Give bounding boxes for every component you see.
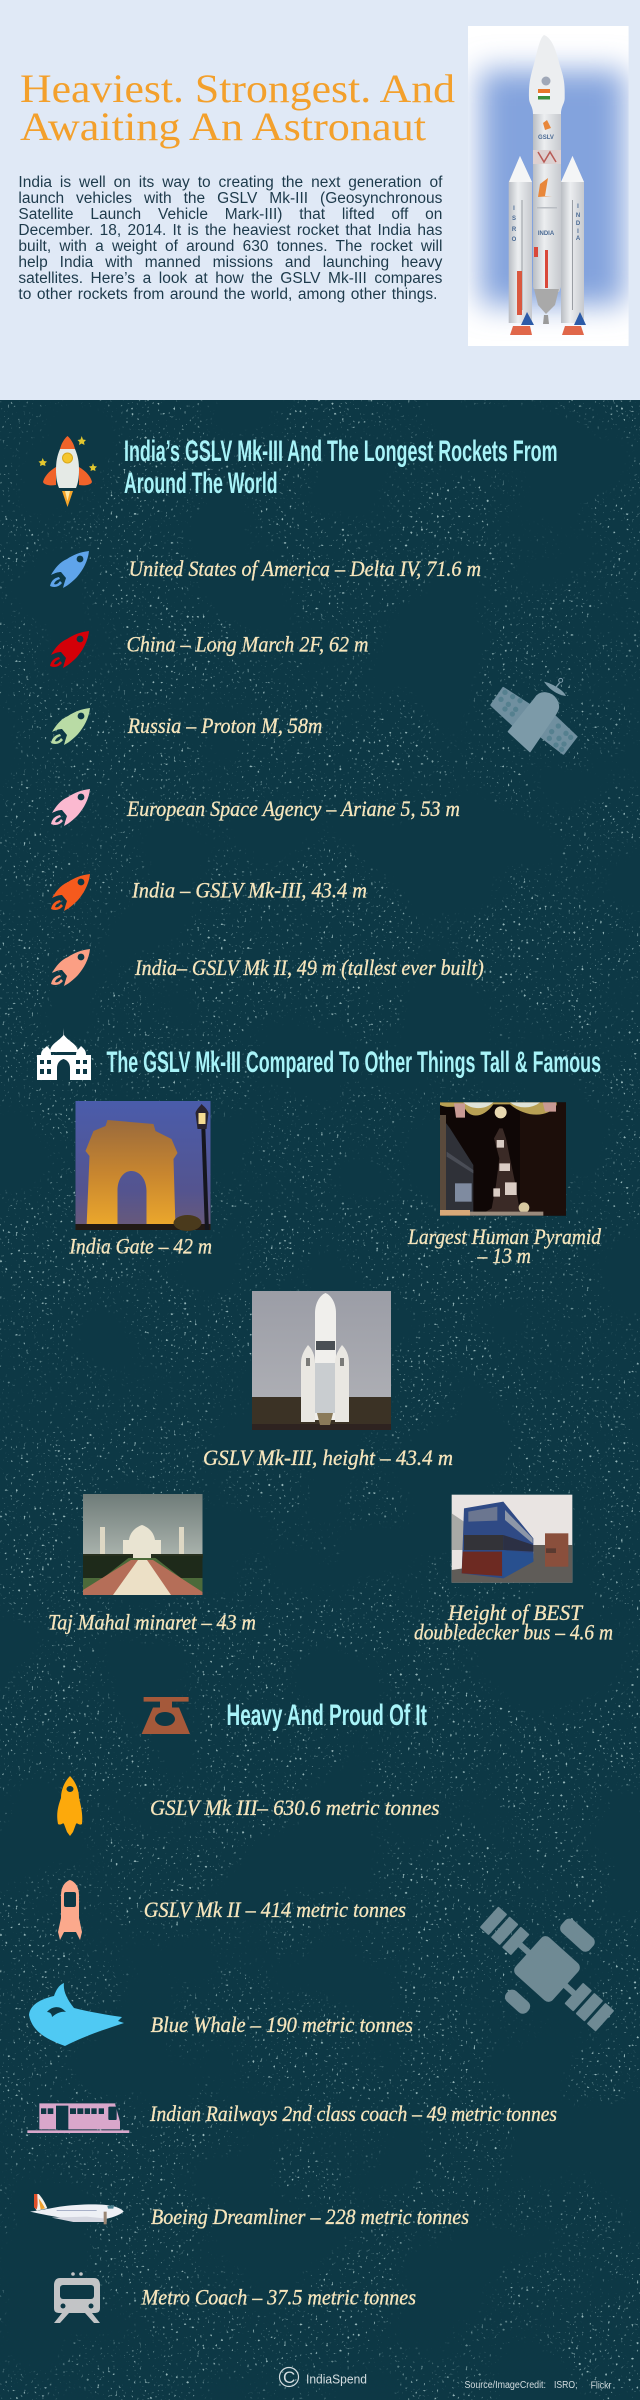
caption: human pyramid	[407, 1224, 602, 1268]
rocket illustration: O	[512, 237, 517, 243]
rocket row: China	[50, 631, 368, 668]
heading text: Heavy And Proud Of It	[226, 1699, 427, 1732]
rocket row: Russia: Russia – Proton M, 58m	[127, 713, 322, 738]
intro paragraph: satellites. Here’s a look at how the GSLV Mk-III compares	[18, 270, 442, 287]
caption: BEST bus	[414, 1600, 613, 1644]
rocket illustration	[468, 26, 629, 346]
rocket row: China: China – Long March 2F, 62 m	[126, 632, 368, 656]
weight row: blue whale	[29, 1983, 413, 2046]
rocket row: European Space Agency: European Space Agency – Ariane 5, 53 m	[126, 796, 460, 821]
title	[20, 66, 455, 149]
rocket illustration: GSLV	[538, 135, 554, 141]
rocket illustration: I	[513, 206, 515, 212]
rocket row: Russia	[51, 708, 322, 745]
rocket row: USA	[50, 551, 481, 588]
footer: source: Flickr	[591, 2380, 612, 2392]
intro paragraph: Satellite Launch Vehicle Mark-III) that lifted off on	[18, 206, 442, 223]
photo: Taj Mahal	[83, 1494, 203, 1595]
rocket illustration: A	[576, 236, 581, 242]
photo: GSLV Mk-III on pad	[252, 1291, 391, 1430]
icon: weighing scale	[142, 1697, 190, 1734]
icon: Taj Mahal	[37, 1028, 91, 1080]
footer: source: Source/ImageCredit:	[464, 2380, 546, 2391]
weight row: plane	[30, 2194, 469, 2229]
footer: source	[464, 2380, 612, 2392]
section heading: heavy	[142, 1697, 427, 1734]
icon: space rocket with stars	[38, 436, 97, 507]
rocket row: India Mk II	[51, 949, 484, 986]
title: Heaviest. Strongest. And	[20, 66, 455, 111]
caption: Taj Mahal: Taj Mahal minaret – 43 m	[48, 1610, 256, 1634]
footer: IndiaSpend credit	[280, 2368, 367, 2387]
weight row: plane: Boeing Dreamliner – 228 metric tonnes	[151, 2204, 469, 2229]
caption: human pyramid: – 13 m	[477, 1243, 531, 1268]
weight row: metro coach	[54, 2272, 416, 2323]
rocket illustration: S	[512, 216, 516, 222]
footer: IndiaSpend credit: C	[283, 2368, 295, 2387]
intro paragraph: built, with a weight of around 630 tonnes. The rocket will	[18, 238, 442, 255]
weight row: metro coach: Metro Coach – 37.5 metric tonnes	[141, 2284, 416, 2309]
icon: satellite with dish	[492, 678, 576, 753]
intro paragraph: December. 18, 2014. It is the heaviest rocket that India has	[18, 222, 442, 239]
rocket row: European Space Agency	[51, 789, 460, 826]
header panel	[0, 0, 640, 400]
photo: India Gate	[76, 1101, 210, 1231]
footer: IndiaSpend credit: IndiaSpend	[306, 2372, 367, 2386]
weight row: GSLV Mk III: GSLV Mk III– 630.6 metric tonnes	[150, 1795, 440, 1820]
weight row: GSLV Mk II	[58, 1880, 406, 1940]
weight row: railway coach: Indian Railways 2nd class coach – 49 metric tonnes	[149, 2101, 557, 2126]
intro paragraph: India is well on its way to creating the next generation of	[18, 174, 442, 191]
photo: human pyramid	[440, 1102, 566, 1216]
section heading: longest rockets	[38, 435, 558, 507]
rocket illustration: I	[577, 204, 579, 210]
rocket illustration: INDIA	[538, 231, 555, 237]
caption: BEST bus: Height of BEST	[447, 1600, 584, 1625]
weight row: GSLV Mk II: GSLV Mk II – 414 metric tonnes	[144, 1897, 406, 1922]
intro paragraph: help India with manned missions and launching heavy	[18, 254, 442, 271]
weight row: blue whale: Blue Whale – 190 metric tonnes	[151, 2012, 413, 2037]
rocket illustration: R	[512, 227, 517, 233]
title: Awaiting An Astronaut	[20, 104, 426, 149]
intro paragraph: to other rockets from around the world, among other things.	[18, 286, 437, 303]
rocket row: USA: United States of America – Delta IV, 71.6 m	[129, 556, 481, 581]
caption: BEST bus: doubledecker bus – 4.6 m	[414, 1620, 613, 1644]
heading text: Around The World	[124, 467, 278, 500]
weight row: railway coach	[27, 2101, 557, 2133]
rocket illustration: N	[576, 213, 580, 219]
photo: BEST bus	[452, 1495, 572, 1583]
intro paragraph: launch vehicles with the GSLV Mk-III (Geosynchronous	[18, 190, 442, 207]
rocket row: India Mk-III: India – GSLV Mk-III, 43.4 m	[131, 878, 367, 903]
footer: source: ISRO;	[554, 2380, 578, 2391]
rocket illustration: D	[576, 221, 581, 227]
rocket row: India Mk II: India– GSLV Mk II, 49 m (tallest ever built)	[134, 955, 484, 980]
weight row: GSLV Mk III	[57, 1776, 440, 1836]
caption: human pyramid: Largest Human Pyramid	[407, 1224, 602, 1249]
rocket row: India Mk-III	[51, 874, 367, 911]
section heading: tall and famous	[37, 1028, 601, 1080]
heading text	[124, 435, 558, 500]
icon: satellite silhouette	[455, 1877, 640, 2059]
rocket illustration: I	[577, 229, 579, 235]
intro paragraph	[18, 174, 442, 303]
caption: GSLV Mk-III: GSLV Mk-III, height – 43.4 m	[203, 1445, 453, 1470]
caption: India Gate: India Gate – 42 m	[69, 1234, 212, 1259]
